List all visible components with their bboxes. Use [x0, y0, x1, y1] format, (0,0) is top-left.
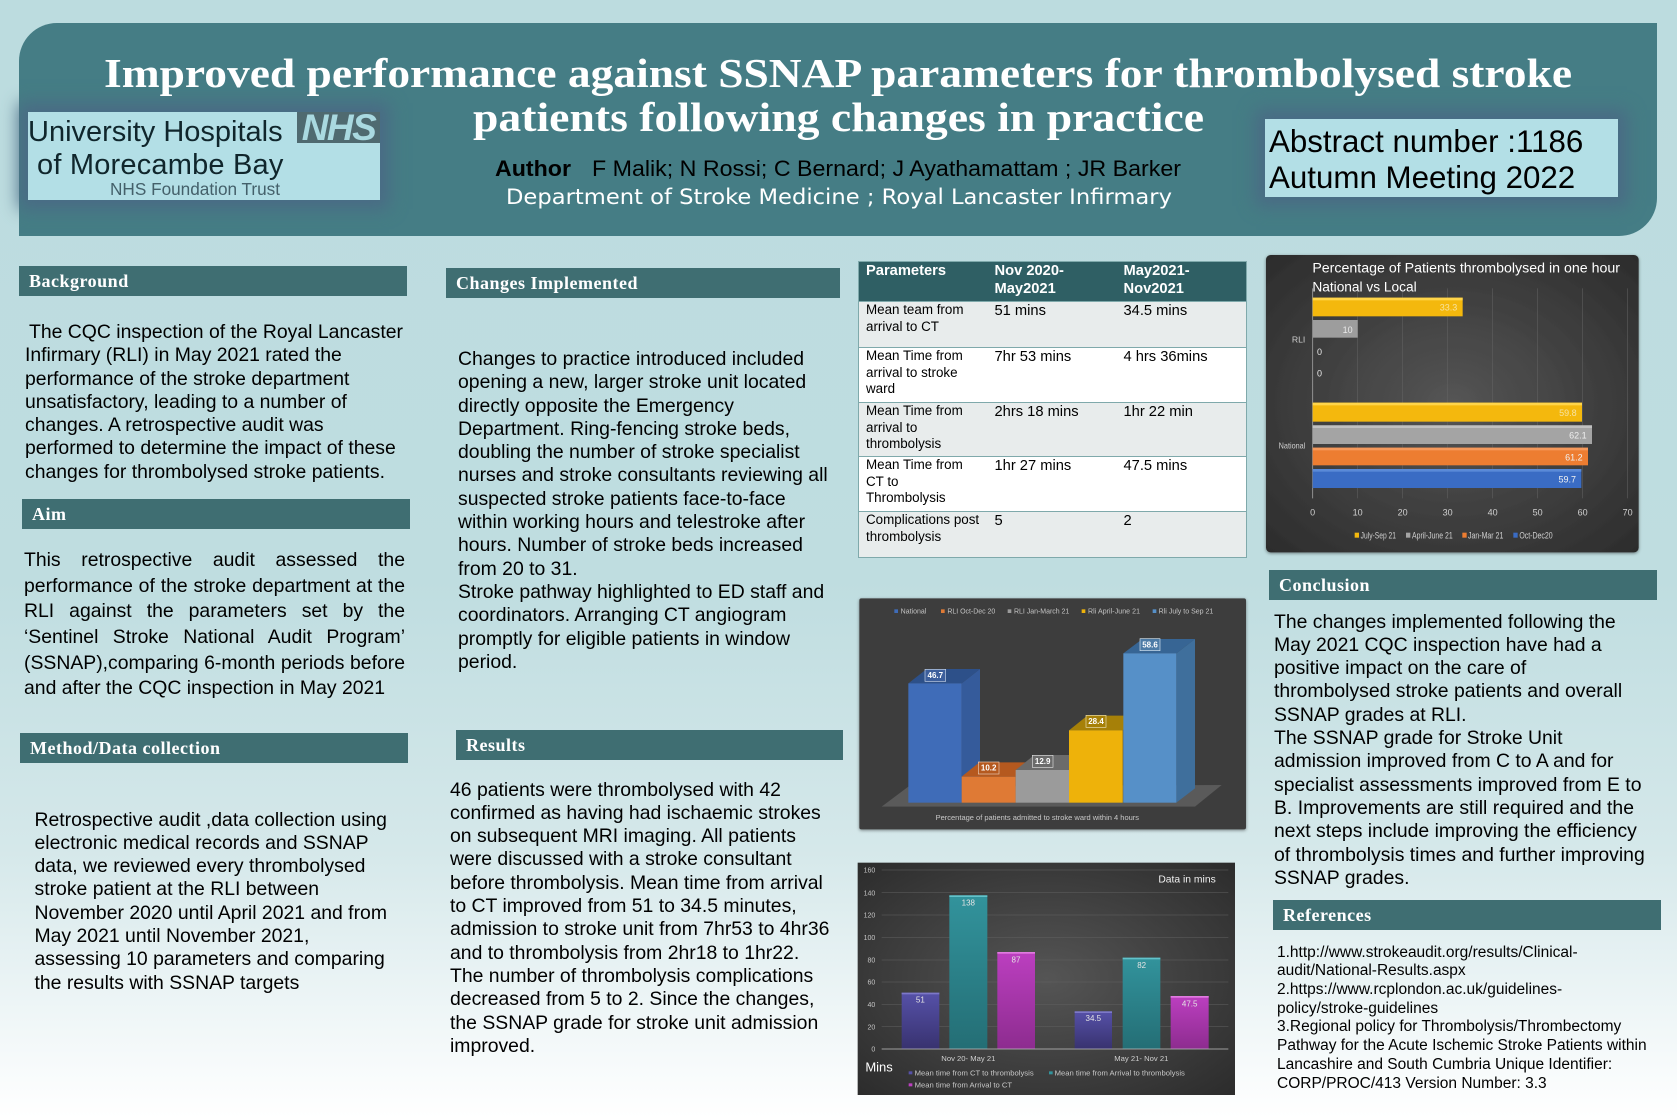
- x axis labels: 30: [1443, 507, 1453, 517]
- table: parameters: 7hr 53 mins: [994, 349, 1071, 365]
- text: changes implemented: opening a new, larger stroke unit located: [458, 371, 806, 393]
- text: aim: ‘Sentinel Stroke National Audit Program’: [24, 626, 405, 648]
- text: conclusion: admission improved from C to A and for: [1274, 750, 1614, 772]
- bars: Nov 20 - May 21: 51: [916, 996, 925, 1005]
- chart panel: [858, 863, 1235, 1095]
- table: parameters: Thrombolysis: [866, 490, 946, 505]
- chart: mean times in minutes: [858, 862, 1235, 1095]
- bars: May 21 - Nov 21: 82: [1137, 961, 1147, 970]
- annotation: data in mins: Data in mins: [1158, 875, 1216, 886]
- text: changes implemented: hours. Number of stroke beds increased: [458, 534, 803, 556]
- legend: Rli July to Sep 21: [1159, 609, 1213, 616]
- text: background: [25, 321, 403, 483]
- text: results: decreased from 5 to 2. Since the changes,: [450, 988, 814, 1010]
- bars: National: 59.7: [1558, 474, 1576, 484]
- text: method: May 2021 until November 2021,: [34, 925, 309, 947]
- legend: [1355, 530, 1553, 540]
- category labels: [1279, 335, 1305, 451]
- text: results: confirmed as having had ischaemic strokes: [450, 802, 821, 824]
- chart: percentage admitted to stroke ward within 4 hours: [857, 597, 1248, 832]
- text: method: [34, 808, 387, 994]
- text: method: data, we reviewed every thrombolysed: [34, 855, 365, 877]
- heading: references: References: [1283, 904, 1372, 924]
- bar: RLI April-June 21 28.4: 28.4: [1088, 717, 1104, 726]
- legend: Rli April-June 21: [1088, 609, 1140, 616]
- authors: F Malik; N Rossi; C Bernard; J Ayathamattam ; JR Barker: [592, 156, 1181, 181]
- text: changes implemented: Changes to practice introduced included: [458, 348, 804, 370]
- banner background: [19, 23, 1657, 236]
- chart title: Percentage of Patients thrombolysed in one hour: [1312, 261, 1620, 276]
- table: parameters: Mean team from: [866, 302, 964, 317]
- table: parameters: Mean Time from: [866, 457, 963, 472]
- text: references: 2.https://www.rcplondon.ac.uk/guidelines-: [1277, 981, 1562, 998]
- text: aim: and after the CQC inspection in May 2021: [24, 677, 385, 699]
- text: background: unsatisfactory, leading to a number of: [25, 391, 347, 413]
- table: parameters: Nov 2020-: [994, 263, 1064, 279]
- text: changes implemented: suspected stroke patients face-to-face: [458, 488, 786, 510]
- bar: RLI July to Sep 21 58.6: [1123, 639, 1195, 803]
- text: results: before thrombolysis. Mean time from arrival: [450, 872, 823, 894]
- chart title: National vs Local: [1312, 280, 1417, 295]
- legend: RLI Jan-March 21: [1014, 609, 1069, 616]
- y axis and gridlines: 20: [868, 1024, 875, 1031]
- category labels: RLI: [1292, 335, 1305, 345]
- x axis labels: 10: [1353, 507, 1363, 517]
- text: results: the SSNAP grade for stroke unit admission: [450, 1012, 818, 1034]
- bars: National: [1313, 403, 1592, 488]
- x axis labels: [941, 1054, 1168, 1063]
- heading: aim: Aim: [32, 504, 66, 524]
- logo panel: [28, 112, 380, 200]
- bars: May 21 - Nov 21: 47.5: [1182, 999, 1198, 1008]
- text: changes implemented: from 20 to 31.: [458, 558, 578, 580]
- bar: RLI Jan-March 21 12.9: 12.9: [1035, 757, 1051, 766]
- text: method: assessing 10 parameters and comparing: [34, 948, 385, 970]
- bar: national 46.7: 46.7: [928, 671, 944, 680]
- logo name: [28, 116, 284, 181]
- table: parameters: ward: [866, 381, 895, 396]
- table: parameters: [858, 261, 1247, 558]
- text: background: Infirmary (RLI) in May 2021 rated the: [25, 344, 342, 366]
- y axis and gridlines: 100: [864, 935, 875, 942]
- title and authors: [104, 50, 1572, 209]
- heading: conclusion: Conclusion: [1279, 575, 1370, 595]
- chart floor: [882, 785, 1222, 807]
- text: aim: RLI against the parameters set by the: [24, 600, 405, 622]
- chart title: [1312, 261, 1620, 295]
- heading: background: Background: [29, 270, 129, 290]
- bars: May 21 - Nov 21: [1075, 958, 1209, 1049]
- text: changes implemented: Department. Ring-fencing stroke beds,: [458, 418, 790, 440]
- y axis and gridlines: 80: [868, 958, 875, 965]
- text: results: The number of thrombolysis complications: [450, 965, 813, 987]
- text: conclusion: positive impact on the care of: [1274, 657, 1526, 679]
- table: parameters: thrombolysis: [866, 436, 941, 451]
- text: results: to CT improved from 51 to 34.5 minutes,: [450, 895, 797, 917]
- text: background: performance of the stroke department: [25, 368, 349, 390]
- table: parameters: May2021-: [1124, 263, 1190, 279]
- text: references: 1.http://www.strokeaudit.org/results/Clinical-: [1277, 944, 1578, 961]
- legend: Mean time from Arrival to CT: [915, 1081, 1012, 1090]
- bars: Nov 20 - May 21: 138: [962, 898, 976, 907]
- bars: Nov 20 - May 21: 87: [1012, 955, 1021, 964]
- bars: Nov 20 - May 21: [902, 895, 1035, 1049]
- heading: conclusion: [1269, 570, 1657, 600]
- text: results: and to thrombolysis from 2hr18 to 1hr22.: [450, 942, 799, 964]
- bars: May 21 - Nov 21: 34.5: [1086, 1014, 1102, 1023]
- text: results: were discussed with a stroke consultant: [450, 848, 792, 870]
- x axis labels: Nov 20- May 21: [941, 1054, 995, 1063]
- legend: Mean time from Arrival to thrombolysis: [1055, 1069, 1185, 1078]
- text: conclusion: next steps include improving the efficiency: [1274, 820, 1637, 842]
- bars: RLI: 10: [1343, 325, 1353, 335]
- text: method: stroke patient at the RLI between: [34, 878, 319, 900]
- header banner: [7, 23, 1657, 236]
- text: aim: (SSNAP),comparing 6-month periods before: [24, 652, 405, 674]
- abstract number box: Autumn Meeting 2022: [1269, 160, 1575, 195]
- text: aim: [24, 549, 405, 699]
- text: results: 46 patients were thrombolysed with 42: [450, 779, 781, 801]
- chart caption: Percentage of patients admitted to stroke ward within 4 hours: [936, 813, 1139, 822]
- text: references: audit/National-Results.aspx: [1277, 962, 1466, 979]
- legend: Mean time from CT to thrombolysis: [915, 1069, 1034, 1078]
- bar: RLI Oct-Dec 20 10.2: 10.2: [981, 764, 997, 773]
- text: conclusion: SSNAP grades at RLI.: [1274, 704, 1467, 726]
- bars: National: 61.2: [1565, 453, 1583, 463]
- table: parameters: arrival to stroke: [866, 364, 958, 380]
- text: conclusion: thrombolysed stroke patients and overall: [1274, 680, 1622, 702]
- text: conclusion: The changes implemented following the: [1274, 611, 1616, 633]
- chart: percentage thrombolysed in one hour: [1264, 254, 1641, 556]
- department: Department of Stroke Medicine ; Royal Lancaster Infirmary: [506, 185, 1172, 209]
- heading: results: Results: [466, 734, 526, 754]
- text: changes implemented: Stroke pathway highlighted to ED staff and: [458, 581, 824, 603]
- category labels: National: [1279, 441, 1305, 451]
- table: parameters: arrival to: [866, 420, 917, 434]
- bar: RLI Jan-March 21 12.9: [1016, 755, 1088, 803]
- x axis labels: May 21- Nov 21: [1114, 1054, 1168, 1063]
- table: parameters: 5: [994, 513, 1003, 529]
- legend: Oct-Dec20: [1519, 530, 1553, 540]
- bars: RLI: 33.3: [1440, 302, 1457, 312]
- y axis and gridlines: 0: [871, 1047, 875, 1054]
- table: parameters: Mean Time from: [866, 348, 963, 363]
- bar: RLI Oct-Dec 20 10.2: [962, 762, 1033, 803]
- text: background: changes for thrombolysed stroke patients.: [25, 461, 385, 483]
- text: changes implemented: within working hours and telestroke after: [458, 511, 805, 533]
- table: parameters: 2hrs 18 mins: [994, 404, 1079, 420]
- bars: RLI: 0: [1317, 369, 1322, 379]
- text: method: November 2020 until April 2021 and from: [34, 902, 387, 924]
- text: conclusion: [1274, 611, 1645, 889]
- bar: RLI April-June 21 28.4: [1069, 715, 1141, 803]
- text: changes implemented: period.: [458, 651, 517, 673]
- bars: RLI: [1313, 298, 1463, 379]
- title: patients following changes in practice: [473, 94, 1204, 140]
- text: references: Lancashire and South Cumbria Unique Identifier:: [1277, 1056, 1612, 1073]
- table: parameters: CT to: [866, 474, 898, 488]
- text: aim: performance of the stroke department at the: [24, 575, 405, 597]
- text: aim: This retrospective audit assessed the: [24, 549, 405, 571]
- legend: Jan-Mar 21: [1468, 530, 1503, 540]
- table: parameters: 34.5 mins: [1124, 303, 1187, 319]
- text: conclusion: of thrombolysis times and further improving: [1274, 844, 1645, 866]
- bars: National: 62.1: [1569, 431, 1587, 441]
- heading: references: [1273, 900, 1661, 930]
- text: background: performed to determine the impact of these: [25, 437, 396, 459]
- legend: National: [901, 609, 927, 616]
- abstract number box: [1265, 119, 1618, 197]
- bars: RLI: 0: [1317, 347, 1322, 357]
- table: parameters: 4 hrs 36mins: [1124, 349, 1208, 365]
- text: references: 3.Regional policy for Thrombolysis/Thrombectomy: [1277, 1018, 1621, 1035]
- heading: method: [20, 733, 408, 763]
- logo name: of Morecambe Bay: [37, 149, 284, 181]
- text: references: policy/stroke-guidelines: [1277, 1000, 1438, 1017]
- text: changes implemented: promptly for eligible patients in window: [458, 628, 790, 650]
- text: changes implemented: nurses and stroke consultants reviewing all: [458, 464, 828, 486]
- heading: changes implemented: [446, 268, 840, 298]
- bar: national 46.7: [908, 669, 980, 803]
- legend: April-June 21: [1412, 530, 1453, 540]
- table: parameters: 47.5 mins: [1124, 458, 1187, 474]
- text: references: [1277, 944, 1647, 1092]
- table: parameters: Complications post: [866, 512, 979, 527]
- x axis labels: 20: [1398, 507, 1408, 517]
- y axis and gridlines: [864, 868, 1228, 1054]
- text: conclusion: specialist assessments improved from E to: [1274, 774, 1641, 796]
- y axis and gridlines: 40: [868, 1002, 875, 1009]
- legend: July-Sep 21: [1361, 530, 1396, 540]
- text: conclusion: B. Improvements are still required and the: [1274, 797, 1634, 819]
- x axis labels: 70: [1623, 507, 1633, 517]
- x axis labels: 40: [1488, 507, 1498, 517]
- legend: RLI Oct-Dec 20: [947, 609, 995, 616]
- bars: National: 59.8: [1559, 408, 1577, 418]
- text: results: on subsequent MRI imaging. All patients: [450, 825, 796, 847]
- legend: [909, 1069, 1185, 1090]
- abstract number box: Abstract number :1186: [1269, 124, 1583, 159]
- table: parameters: May2021: [994, 281, 1056, 297]
- title: Improved performance against SSNAP parameters for thrombolysed stroke: [104, 50, 1572, 96]
- text: background: The CQC inspection of the Royal Lancaster: [29, 321, 403, 343]
- heading: background: [19, 266, 407, 296]
- y axis and gridlines: 120: [864, 913, 875, 920]
- gridlines: [1358, 288, 1628, 498]
- text: references: CORP/PROC/413 Version Number: 3.3: [1277, 1075, 1547, 1092]
- table: parameters: Mean Time from: [866, 403, 963, 418]
- title: [104, 50, 1572, 140]
- axis label: mins: Mins: [865, 1060, 893, 1075]
- table: parameters: 51 mins: [994, 303, 1046, 319]
- text: changes implemented: doubling the number of stroke specialist: [458, 441, 800, 463]
- text: background: changes. A retrospective audit was: [25, 414, 324, 436]
- text: conclusion: SSNAP grades.: [1274, 867, 1409, 889]
- text: conclusion: May 2021 CQC inspection have had a: [1274, 634, 1602, 656]
- text: method: electronic medical records and SSNAP: [34, 832, 369, 854]
- x axis labels: [1310, 507, 1633, 517]
- x axis labels: 0: [1310, 507, 1315, 517]
- table: parameters: arrival to CT: [866, 318, 939, 334]
- bar: RLI July to Sep 21 58.6: 58.6: [1142, 640, 1158, 649]
- logo name: University Hospitals: [28, 116, 283, 148]
- y axis and gridlines: 60: [868, 980, 875, 987]
- heading: method: Method/Data collection: [30, 738, 220, 758]
- text: results: [450, 779, 829, 1057]
- table: parameters: 2: [1124, 513, 1132, 529]
- y axis and gridlines: 160: [864, 868, 875, 875]
- text: references: Pathway for the Acute Ischemic Stroke Patients within: [1277, 1037, 1647, 1054]
- table: parameters: 1hr 22 min: [1124, 404, 1193, 420]
- text: method: Retrospective audit ,data collection using: [34, 808, 387, 830]
- authors: Author: [495, 156, 571, 181]
- x axis labels: 60: [1578, 507, 1588, 517]
- heading: results: [456, 730, 843, 760]
- heading: changes implemented: Changes Implemented: [456, 272, 638, 292]
- x axis labels: 50: [1533, 507, 1543, 517]
- text: results: admission to stroke unit from 7hr53 to 4hr36: [450, 918, 829, 940]
- y axis and gridlines: 140: [864, 890, 875, 897]
- text: changes implemented: directly opposite the Emergency: [458, 395, 734, 417]
- legend: [894, 609, 1213, 616]
- text: changes implemented: [458, 348, 828, 673]
- text: results: improved.: [450, 1035, 535, 1057]
- table: parameters: Parameters: [866, 263, 946, 279]
- chart panel: [1266, 255, 1639, 552]
- text: method: the results with SSNAP targets: [34, 972, 299, 994]
- table: parameters: 1hr 27 mins: [994, 458, 1071, 474]
- logo trust line: NHS Foundation Trust: [110, 179, 280, 199]
- table: parameters: thrombolysis: [866, 528, 941, 544]
- heading: aim: [22, 498, 410, 528]
- chart panel: [859, 598, 1246, 829]
- text: conclusion: The SSNAP grade for Stroke Unit: [1274, 727, 1562, 749]
- table: parameters: Nov2021: [1124, 281, 1184, 297]
- text: changes implemented: coordinators. Arranging CT angiogram: [458, 604, 786, 626]
